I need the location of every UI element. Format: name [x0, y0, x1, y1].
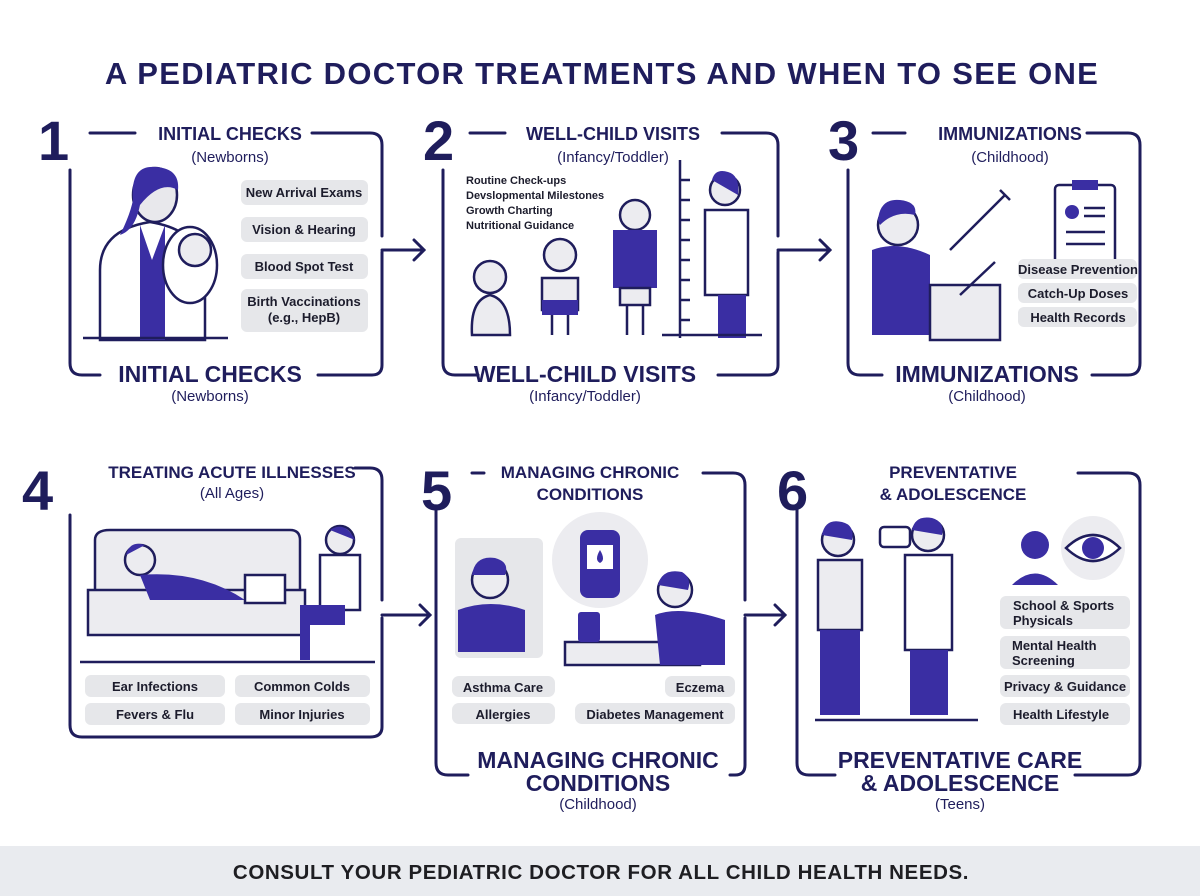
list items: Fevers & Flu: [116, 707, 194, 722]
title: A PEDIATRIC DOCTOR TREATMENTS AND WHEN TO SEE ONE: [105, 56, 1099, 91]
number 1: 1: [38, 109, 69, 172]
list items: (e.g., HepB): [268, 310, 340, 325]
panel: initial checks: [38, 109, 424, 405]
bottom heading: INITIAL CHECKS: [118, 361, 302, 387]
number 3: 3: [828, 109, 859, 172]
list items: Diabetes Management: [586, 707, 724, 722]
list items: Screening: [1012, 653, 1075, 668]
text list: Routine Check-ups: [466, 175, 566, 187]
heading: IMMUNIZATIONS: [938, 124, 1082, 144]
text list: Growth Charting: [466, 205, 553, 217]
list items: Allergies: [476, 707, 530, 722]
panel: well-child visits: [423, 109, 830, 405]
list items: Vision & Hearing: [252, 222, 356, 237]
panel: preventative & adolescence: & ADOLESCENCE: [880, 485, 1026, 504]
number 6: 6: [777, 459, 808, 522]
list items: Health Records: [1030, 310, 1126, 325]
bottom heading: WELL-CHILD VISITS: [474, 361, 696, 387]
icon: sick child on sofa with doctor: [80, 526, 375, 662]
list items: Disease Prevention: [1018, 262, 1138, 277]
list items: Eczema: [676, 680, 725, 695]
list items: Common Colds: [254, 679, 350, 694]
number 5: 5: [421, 459, 452, 522]
panel: preventative & adolescence: & ADOLESCENCE: [861, 770, 1059, 796]
panel: initial checks: (Newborns): [171, 388, 249, 405]
panel: immunizations: (Childhood): [971, 149, 1049, 166]
list items: [85, 675, 370, 725]
panel: chronic conditions: CONDITIONS: [526, 770, 670, 796]
panel: chronic conditions: [421, 459, 785, 813]
arrow 5 to 6: [745, 605, 785, 625]
panel: well-child visits: (Infancy/Toddler): [557, 149, 669, 166]
bottom heading: IMMUNIZATIONS: [895, 361, 1079, 387]
icon: child getting shot and clipboard: [872, 180, 1115, 340]
list items: Blood Spot Test: [255, 259, 354, 274]
number 2: 2: [423, 109, 454, 172]
list items: New Arrival Exams: [246, 185, 362, 200]
panel: initial checks: (Newborns): [191, 149, 269, 166]
list items: Ear Infections: [112, 679, 198, 694]
heading: MANAGING CHRONIC: [501, 463, 679, 482]
list items: Health Lifestyle: [1013, 707, 1109, 722]
heading: WELL-CHILD VISITS: [526, 124, 700, 144]
list items: Catch-Up Doses: [1028, 286, 1128, 301]
bottom heading: PREVENTATIVE CARE: [838, 747, 1082, 773]
arrow 4 to 5: [382, 605, 430, 625]
list items: Physicals: [1013, 613, 1073, 628]
icon: asthma inhaler and glucose meter: [455, 512, 725, 665]
panel: chronic conditions: (Childhood): [559, 796, 637, 813]
arrow 1 to 2: [382, 240, 424, 260]
text list: Devslopmental Milestones: [466, 190, 604, 202]
heading: PREVENTATIVE: [889, 463, 1017, 482]
panel: immunizations: [828, 109, 1140, 405]
panel: immunizations: (Childhood): [948, 388, 1026, 405]
icon: teen and doctor, eye: [815, 516, 1125, 720]
footer band: CONSULT YOUR PEDIATRIC DOCTOR FOR ALL CHILD HEALTH NEEDS.: [233, 861, 969, 884]
list items: Mental Health: [1012, 638, 1097, 653]
heading: INITIAL CHECKS: [158, 124, 302, 144]
panel: acute illnesses: [22, 459, 430, 737]
footer band: [0, 846, 1200, 896]
list items: School & Sports: [1013, 598, 1114, 613]
list items: Birth Vaccinations: [247, 294, 361, 309]
panel: preventative & adolescence: [777, 459, 1140, 813]
heading: TREATING ACUTE ILLNESSES: [108, 463, 356, 482]
panel: preventative & adolescence: (Teens): [935, 796, 985, 813]
panel: well-child visits: (Infancy/Toddler): [529, 388, 641, 405]
number 4: 4: [22, 459, 53, 522]
list items: [1018, 259, 1138, 327]
panel: chronic conditions: CONDITIONS: [537, 485, 643, 504]
list items: [452, 676, 735, 724]
icon: children and doctor with height chart: [472, 160, 762, 338]
list items: [241, 180, 368, 332]
text list: Nutritional Guidance: [466, 220, 574, 232]
list items: Privacy & Guidance: [1004, 679, 1126, 694]
panel: acute illnesses: (All Ages): [200, 485, 264, 502]
icon: doctor holding baby: [83, 167, 228, 340]
bottom heading: MANAGING CHRONIC: [477, 747, 719, 773]
list items: [1000, 596, 1130, 725]
list items: Minor Injuries: [259, 707, 345, 722]
arrow 2 to 3: [778, 240, 830, 260]
list items: Asthma Care: [463, 680, 543, 695]
text list: [466, 175, 604, 232]
